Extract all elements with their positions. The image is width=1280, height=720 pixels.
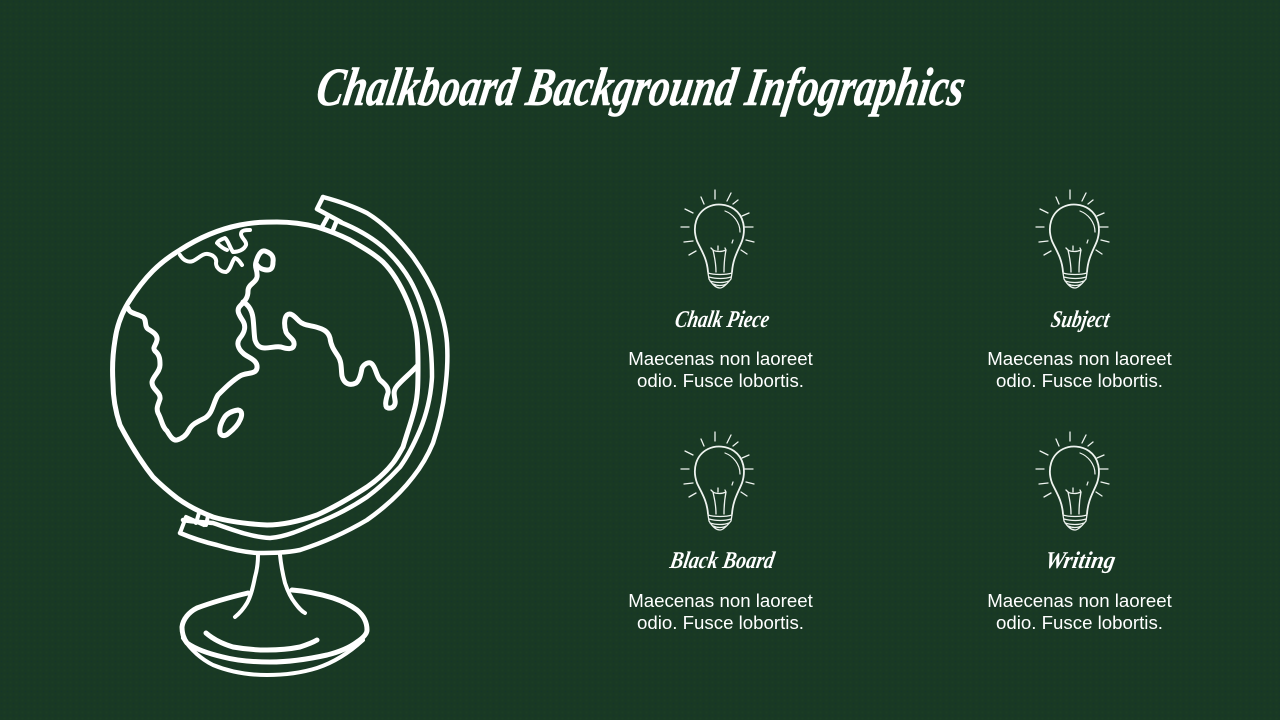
text: Writing description: odio. Fusce lobortis. xyxy=(996,612,1163,633)
icon: light bulb xyxy=(681,190,754,288)
top bracket xyxy=(317,197,341,230)
inner meridian ring xyxy=(183,222,432,538)
heading: Black Board: Black Board xyxy=(667,547,777,574)
text: Chalk Piece description: odio. Fusce lobortis. xyxy=(637,370,804,391)
icon: light bulb xyxy=(1036,190,1109,288)
central continent xyxy=(243,302,417,408)
item: Chalk Piece xyxy=(628,190,814,391)
island xyxy=(220,410,242,436)
base lower rim xyxy=(183,638,363,675)
heading: Chalk Piece: Chalk Piece xyxy=(673,306,772,333)
icon: light bulb xyxy=(681,432,754,530)
outer meridian ring xyxy=(180,197,447,553)
item: Writing xyxy=(987,432,1173,633)
icon: light bulb xyxy=(1036,432,1109,530)
stand base xyxy=(182,590,367,662)
text: Black Board description: odio. Fusce lobortis. xyxy=(637,612,804,633)
left continent xyxy=(128,251,273,440)
heading: Subject: Subject xyxy=(1049,306,1113,333)
text: Subject description: odio. Fusce lobortis. xyxy=(996,370,1163,391)
text: Subject description: Maecenas non laoreet xyxy=(987,348,1173,369)
globe sphere outline xyxy=(113,222,418,525)
text: Writing description: Maecenas non laoreet xyxy=(987,590,1173,611)
item: Subject xyxy=(987,190,1173,391)
item: Black Board xyxy=(628,432,814,633)
bottom bracket xyxy=(180,513,208,533)
illustration: globe on a stand xyxy=(113,197,447,675)
stand stem xyxy=(235,555,305,617)
title: Chalkboard Background Infographics xyxy=(312,57,970,117)
text: Black Board description: Maecenas non laoreet xyxy=(628,590,814,611)
heading: Writing: Writing xyxy=(1043,547,1118,574)
northern coast xyxy=(180,230,250,272)
text: Chalk Piece description: Maecenas non laoreet xyxy=(628,348,814,369)
base highlight xyxy=(206,633,317,650)
